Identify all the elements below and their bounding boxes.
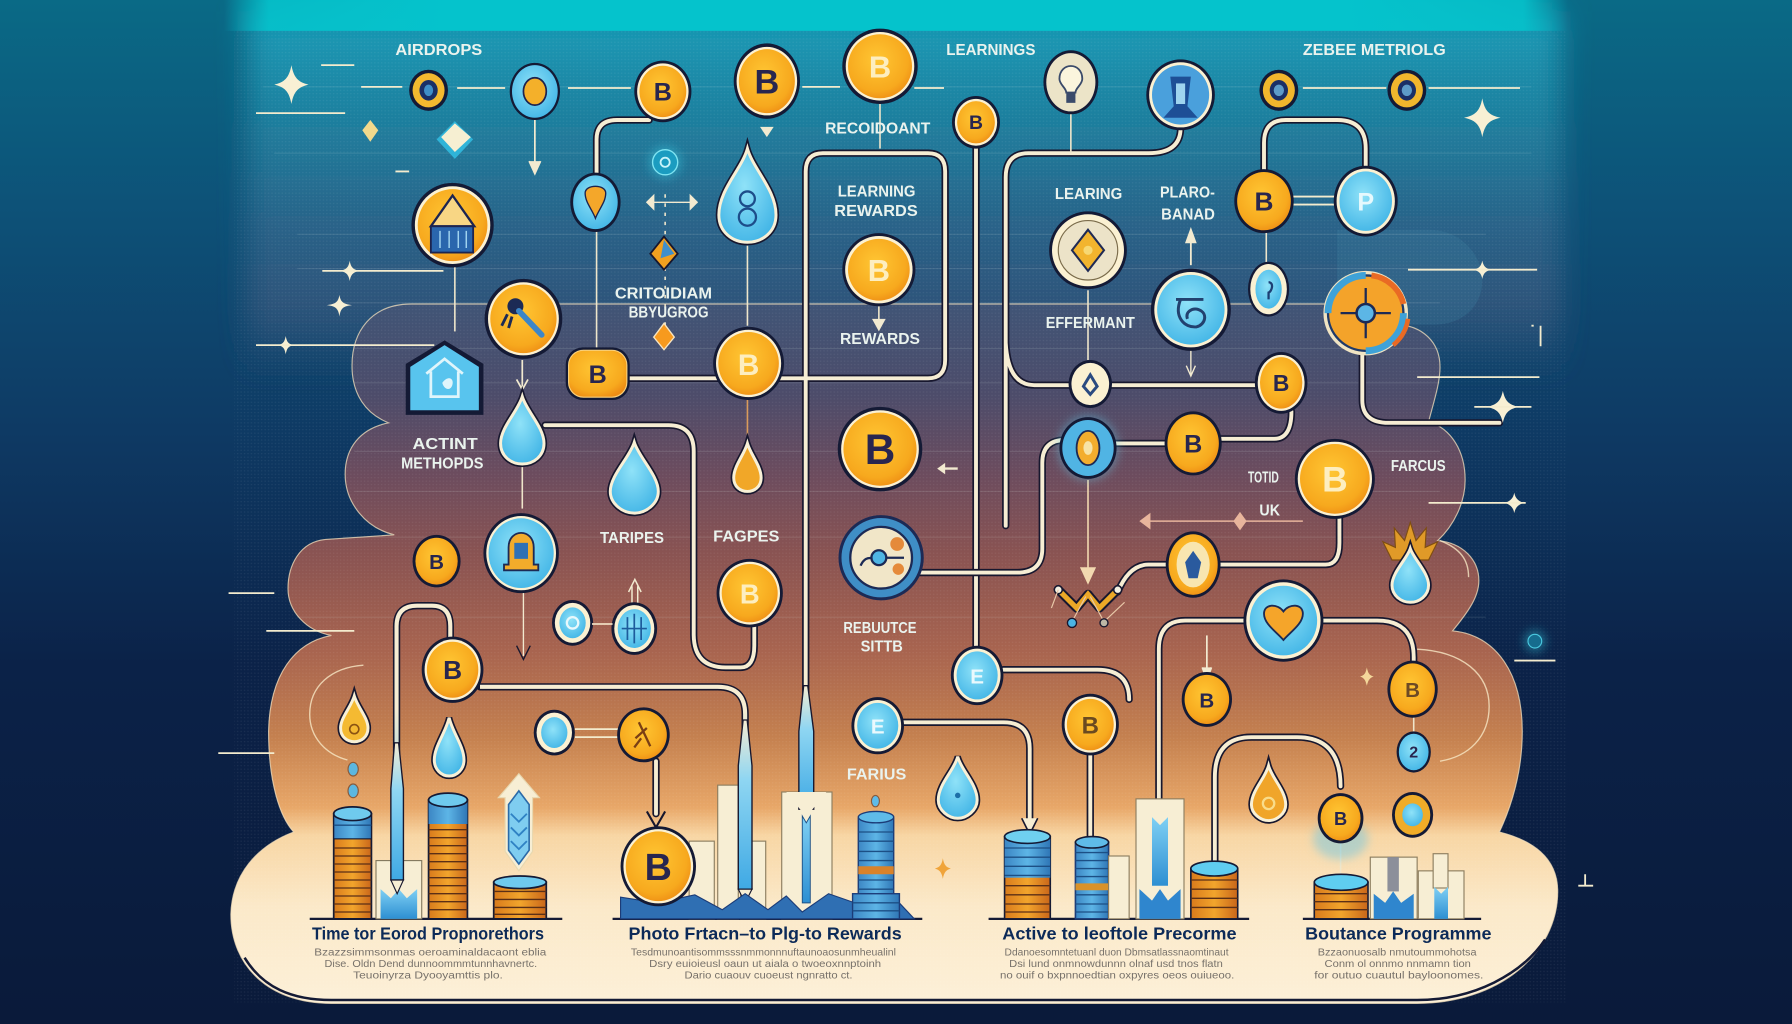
icon: yellow small star right (1360, 667, 1374, 686)
label: uk: UK (1259, 502, 1280, 519)
text: column four body (1314, 947, 1483, 981)
buildings (689, 785, 832, 919)
stack three (494, 876, 546, 919)
pipe: link bulb coin to frame (1070, 112, 1072, 153)
label: farius: FARIUS (847, 766, 907, 783)
text: column two body: Dario cuaouv cuoeust ngnratto ct. (685, 970, 853, 981)
coin: gold center: B (738, 349, 759, 382)
chart: stacks group two (613, 686, 922, 919)
coin: gold orange (1234, 169, 1294, 233)
coin: blue lower left (851, 697, 904, 754)
buildings right (1418, 854, 1464, 919)
coin: narrow gold figure (1166, 531, 1221, 598)
coin: cream orange gold side: B (443, 655, 462, 685)
blue mountains (621, 894, 914, 919)
label: actint methods (401, 436, 484, 473)
coin: big gold lower: B (645, 846, 672, 888)
arrow: down to wave (1081, 480, 1095, 583)
coin: blue lower center: E (970, 665, 984, 688)
coin: small blue at (552, 600, 593, 646)
label: plaro banad: BANAD (1161, 206, 1215, 223)
coin: gold orange: B (1255, 186, 1273, 216)
droplet: loop blue (610, 442, 658, 513)
coin: cream bulb (1043, 50, 1098, 114)
pipe: coin to lower bar (480, 687, 745, 891)
coin: blue bell (483, 513, 559, 593)
pipe: double link right coins (1289, 197, 1337, 205)
label: totid: TOTID (1248, 469, 1279, 486)
arrow: up pair (629, 579, 641, 608)
text: column one body (314, 947, 547, 981)
coin: ring 2 (1259, 70, 1298, 111)
label: learning rewards: LEARNING (838, 184, 915, 201)
pipe: blue coin to gold coin and up (1114, 411, 1291, 443)
pipe: left hook (397, 606, 450, 874)
arrow: below blue coin (529, 117, 541, 174)
coin: light blue (1334, 166, 1398, 237)
arrow: double pink (1141, 513, 1303, 529)
baseline three (989, 918, 1249, 920)
coin: gold side: B (740, 578, 760, 609)
label: efferment: EFFERMANT (1046, 315, 1135, 332)
coin: gold with glow: B (1334, 808, 1347, 829)
coin: ring 1 (409, 70, 448, 111)
bar with chevron one (376, 861, 422, 919)
text: column three body (1000, 947, 1234, 981)
coin: gold large B (734, 43, 800, 119)
bottom edge of cream panel (245, 939, 1545, 1000)
label: rebuutce sittb: REBUUTCE (843, 620, 917, 637)
coin: top gold: B (869, 50, 891, 85)
panel: translucent teal lobe (1337, 230, 1482, 325)
coin: big center (838, 407, 922, 491)
arrow: left of big coin (937, 463, 958, 474)
icon: leaf droplet (1383, 522, 1438, 602)
pipe: droplet loop (545, 425, 754, 667)
coin: gold right lobe: B (1405, 679, 1420, 702)
text: column four body: for outuo cuautul bayloonomes. (1314, 970, 1483, 981)
icon: blue diamond (437, 121, 473, 159)
coin: small blue grid (611, 602, 657, 655)
label: critoidiam (615, 285, 712, 322)
small building (1109, 856, 1129, 919)
pipe end: left hook into bar (391, 743, 403, 894)
baseline four (1303, 918, 1481, 920)
label: airdrops: AIRDROPS (395, 42, 483, 59)
stack eight (1314, 874, 1368, 919)
pipe: rounded rectangle and long drop (629, 153, 945, 800)
coin: dark blue small: 2 (1409, 745, 1418, 762)
droplet: blue lower center (938, 757, 977, 818)
label: rebuutce sittb: SITTB (861, 638, 903, 655)
stack two (429, 793, 467, 919)
pipe: long vertical center (973, 143, 979, 654)
pipe: blue coin to blue stack (903, 722, 1038, 834)
chart: stacks group three (989, 799, 1249, 919)
text: column three body: Ddanoesomntetuanl duon Dbmsatlassnaomtinaut (1005, 947, 1229, 958)
stack six (1075, 837, 1109, 919)
title: column three: Active to leoftole Precorme (1002, 923, 1237, 943)
arrow: coin to big coin (647, 761, 665, 827)
coin: small cream blue (1248, 262, 1289, 317)
coin: gold spiky (1165, 411, 1222, 475)
coin: gold side (717, 559, 783, 627)
arrow: down to gold coin (1186, 349, 1195, 376)
coin: gold B: B (654, 79, 672, 107)
icon: small glowing rune (648, 145, 682, 179)
coin: big gold lower (621, 826, 696, 906)
coin: dark blue small (1397, 731, 1431, 773)
coin: gold B (634, 61, 691, 122)
text: column two body: Tesdmunoantisommsssnmmonnnuftaunoaosunmheualinl (631, 947, 896, 958)
title: column four: Boutance Programme (1305, 923, 1492, 943)
arrow: under rewards coin (872, 319, 886, 331)
coin: cream orange gold side (422, 637, 483, 703)
droplet: small orange (734, 443, 761, 491)
text: column two body: Dsry euioieusl oaun ut aiala o twoeoxnnptoinh (649, 959, 881, 970)
coin: light blue: P (1357, 188, 1374, 216)
label: critoidiam: BBYUGROG (629, 305, 709, 322)
stack seven (1191, 861, 1238, 919)
pipe: top row connectors (361, 87, 1520, 88)
central bar with chevron (1136, 799, 1184, 919)
label: zebee metriolg: ZEBEE METRIOLG (1303, 42, 1446, 59)
building with chevron (1370, 857, 1417, 919)
coin: gold right lobe (1387, 661, 1438, 718)
coin: big right (1295, 439, 1375, 519)
label: fagpes: FAGPES (713, 529, 780, 546)
pipe: chart to coin to big coin (1118, 517, 1339, 592)
top band (0, 0, 1792, 31)
coin: rounded square B: B (589, 361, 607, 389)
title: column two: Photo Frtacn–to Plg-to Rewards (629, 923, 902, 943)
coin: rounded square B (566, 347, 630, 400)
label: plaro banad: PLARO- (1160, 185, 1215, 202)
label: plaro banad (1160, 185, 1215, 223)
droplet: under key coin (501, 397, 544, 464)
label: critoidiam: CRITOIDIAM (615, 285, 712, 302)
stack four (853, 795, 899, 919)
pipe end: long drop blue (786, 686, 826, 903)
pipe: thin link pin to square coin (596, 231, 598, 354)
pipe: coin to stack (1087, 752, 1093, 837)
coin: narrow: B (969, 112, 983, 134)
shield arrow (498, 774, 539, 871)
arrow: below key coin (517, 360, 528, 390)
coin: gold lower center: B (1082, 713, 1099, 740)
coin: gold right frame (1255, 352, 1307, 414)
icon: small facet gem (650, 237, 678, 270)
label: recombant: RECOIDOANT (825, 121, 930, 138)
coin: blue lower center (951, 646, 1003, 705)
pipe: wheel to blue coin (909, 440, 1065, 573)
coin: key icon (485, 279, 562, 359)
droplet: large blue with eight (719, 149, 776, 242)
droplet: small dots (348, 762, 358, 798)
coin: small blue swirl (534, 710, 575, 755)
text: column one body: Dise. Oldn Dend dunnoommmtunnhavnertc. (325, 959, 537, 970)
coin: blue swirl (1151, 269, 1231, 351)
icon: tiny marker right (1531, 326, 1593, 886)
icon: small yellow diamond (362, 120, 378, 142)
coin: heart blue (1243, 579, 1323, 662)
coin: gold right frame: B (1273, 370, 1289, 396)
coin: blue glow (1057, 415, 1119, 481)
panel: stepped cloud field (231, 304, 1558, 1003)
label: actint methods: ACTINT (413, 436, 478, 453)
label: learning rewards: REWARDS (834, 203, 918, 220)
droplet: orange lower right (1251, 766, 1286, 821)
pipe end: lower bar blue (738, 720, 752, 903)
coin: gold with glow (1313, 793, 1368, 859)
chart: stacks group one (310, 743, 562, 919)
pipe: heart coin to bar (1159, 621, 1243, 806)
text: column three body: Dsi lund onmnowdunnn olnaf usd tnos flatn (1009, 959, 1223, 970)
text: column four body: Conm ol onnmo nnmamn tion (1325, 959, 1471, 970)
label: taripes: TARIPES (600, 530, 664, 547)
text: column one body: Bzazzsimmsonmas oeroaminaldacaont eblia (314, 947, 547, 958)
pipe: loop over right coins (1264, 120, 1366, 171)
droplet: blue narrow (434, 718, 464, 776)
coin: big right: B (1322, 459, 1348, 499)
inner arcs of cloud lobes (310, 541, 1489, 761)
coin: gold center (713, 327, 784, 400)
arrow: under bell coin (517, 592, 530, 659)
icon: orange diamond (654, 323, 674, 350)
wheel icon (840, 517, 922, 599)
label: rewards: REWARDS (840, 331, 920, 348)
coin: cream diamond (1049, 211, 1127, 289)
pipe: target to star (1362, 349, 1499, 423)
coin: heart side gold (1182, 672, 1232, 727)
coin: orange figure (617, 707, 670, 762)
label: learnings: LEARNINGS (946, 42, 1036, 59)
label: actint methods: METHOPDS (401, 456, 484, 473)
arrow: above coin (1202, 635, 1211, 680)
coin: gold lower center (1062, 694, 1119, 755)
coin: gold spiky: B (1184, 431, 1202, 459)
text: column two body (631, 947, 896, 981)
coin: complex target (1323, 271, 1408, 355)
coin: rewards gold (842, 233, 915, 306)
arrow: small double head (647, 195, 697, 209)
connector: small blue pair (592, 623, 613, 625)
baseline two (613, 918, 922, 920)
coin: gold hash: B (429, 551, 444, 574)
arrow: up to plaro label (1186, 230, 1195, 265)
label: learning rewards (834, 184, 918, 220)
star decorations with lines (218, 65, 1539, 753)
pipe: small coin pair (575, 729, 618, 737)
text: column three body: no ouif o bxpnnoedtian oxpyres oeos ouiueoo. (1000, 970, 1234, 981)
label: learing: LEARING (1055, 186, 1122, 203)
coin: blue with gold center (510, 63, 560, 120)
pipe: blue coin to right frame (1006, 128, 1257, 526)
coin: heart side gold: B (1199, 689, 1214, 712)
coin: rewards gold: B (868, 253, 890, 288)
coin: top gold (842, 29, 918, 104)
icon: blue house tile (407, 342, 482, 414)
panel: upper teal field (247, 11, 1561, 375)
coin: gold hash (413, 535, 461, 587)
label: farcus: FARCUS (1391, 458, 1446, 475)
baseline one (310, 918, 562, 920)
pipe: blue coin hook (1003, 670, 1129, 699)
panel texture (234, 31, 1566, 1002)
coin: big center: B (865, 426, 895, 473)
title: column one: Time tor Eorod Propnorethors (312, 923, 544, 943)
label: rebuutce sittb (843, 620, 917, 655)
coin: blue pin (570, 173, 621, 232)
coin: narrow (952, 96, 1000, 149)
thin links (455, 103, 1414, 880)
stack five (1005, 830, 1050, 919)
coin: blue in yellow ring (1392, 792, 1433, 838)
text: column four body: Bzzaonuosalb nmutoummohotsa (1318, 947, 1477, 958)
coin: cream small (1069, 360, 1112, 408)
stack one (334, 807, 371, 919)
text: column one body: Teuoinyrza Dyooyamttis plo. (353, 970, 503, 981)
pipe: coin to blue pin (597, 120, 649, 181)
arrow: small triangle (760, 127, 774, 137)
pipe: heart coin to coin (1323, 621, 1414, 666)
droplet: gold small left (341, 696, 368, 742)
coin: blue monument (1146, 59, 1215, 130)
coin: gold large B: B (754, 64, 779, 102)
chart: stacks group four (1303, 854, 1481, 919)
coin: house icon (411, 183, 494, 267)
coin: blue lower left: E (871, 716, 885, 739)
icon: orange star bottom 1 (935, 858, 951, 879)
wave chart icon (1051, 586, 1125, 627)
icon: glow orb right (1514, 630, 1555, 661)
pipe: stack to coin arch (1215, 737, 1341, 869)
faint guide lines (263, 87, 1531, 617)
coin: ring 3 (1387, 70, 1426, 111)
